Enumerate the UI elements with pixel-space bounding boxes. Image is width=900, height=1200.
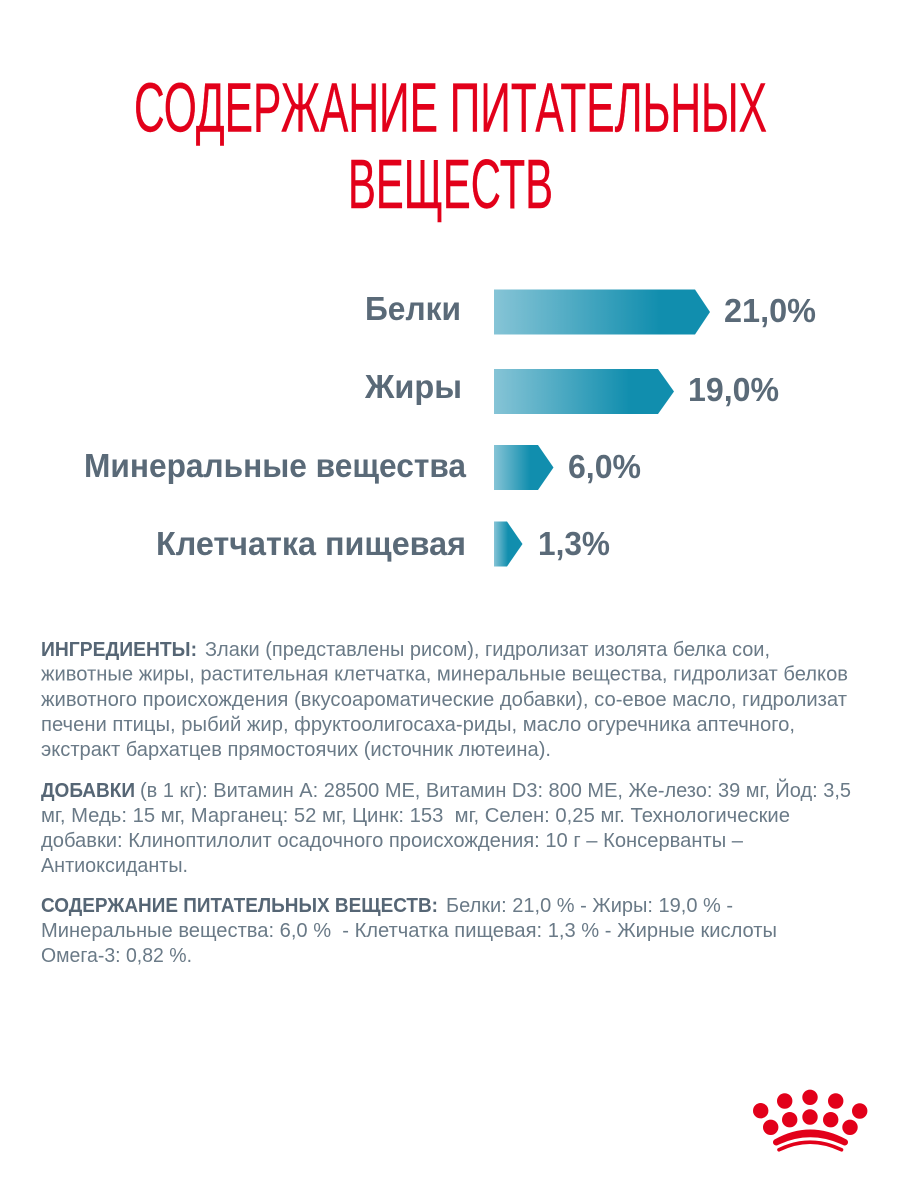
title: ВЕЩЕСТВ <box>348 145 553 223</box>
text block: additives: (в 1 кг): Витамин А: 28500 МЕ, Витамин D3: 800 МЕ, Же-лезо: 39 мг, Йод: 3,5 <box>140 778 851 802</box>
text block: additives <box>41 778 851 877</box>
row: fibre: Клетчатка пищевая <box>156 525 466 562</box>
text block: additives: добавки: Клиноптилолит осадочного происхождения: 10 г – Консерванты – <box>41 830 744 852</box>
text block: ingredients: животные жиры, растительная клетчатка, минеральные вещества, гидролизат белков <box>41 664 848 686</box>
text block: ingredients: печени птицы, рыбий жир, фруктоолигосаха-риды, масло огуречника аптечного, <box>41 714 795 736</box>
row: protein: Белки <box>365 290 461 327</box>
row: fats: 19,0% <box>688 371 779 408</box>
row: minerals: 6,0% <box>568 448 641 485</box>
bar chart: nutrient content <box>84 290 816 566</box>
row: fats: Жиры <box>364 368 462 405</box>
text block: nutrient content: Белки: 21,0 % - Жиры: 19,0 % - <box>446 895 733 917</box>
text block: ingredients <box>41 639 848 761</box>
text block: ingredients: животного происхождения (вкусоароматические добавки), со-евое масло, гидролизат <box>41 689 847 711</box>
text block: nutrient content <box>41 895 777 967</box>
row: protein: 21,0% <box>724 292 816 329</box>
text block: additives: мг, Медь: 15 мг, Марганец: 52 мг, Цинк: 153 мг, Селен: 0,25 мг. Технологические <box>41 805 790 827</box>
row: fibre: 1,3% <box>538 525 610 562</box>
row: minerals: Минеральные вещества <box>84 447 467 484</box>
text block: nutrient content: СОДЕРЖАНИЕ ПИТАТЕЛЬНЫХ ВЕЩЕСТВ: <box>41 895 438 917</box>
text block: ingredients: экстракт бархатцев прямостоячих (источник лютеина). <box>41 739 551 761</box>
text block: additives: ДОБАВКИ <box>41 780 135 802</box>
row: protein <box>365 290 816 334</box>
row: minerals <box>84 445 641 490</box>
row: fats <box>364 368 779 414</box>
text block: additives: Антиоксиданты. <box>41 855 188 877</box>
text block: ingredients: Злаки (представлены рисом), гидролизат изолята белка сои, <box>205 639 770 661</box>
text block: nutrient content: Омега-3: 0,82 %. <box>41 945 192 967</box>
row: fibre <box>156 522 610 566</box>
icon: Royal Canin crown logo <box>753 1090 867 1150</box>
title <box>134 68 767 223</box>
text block: ingredients: ИНГРЕДИЕНТЫ: <box>41 639 197 661</box>
text block: nutrient content: Минеральные вещества: 6,0 % - Клетчатка пищевая: 1,3 % - Жирные кислоты <box>41 920 777 942</box>
